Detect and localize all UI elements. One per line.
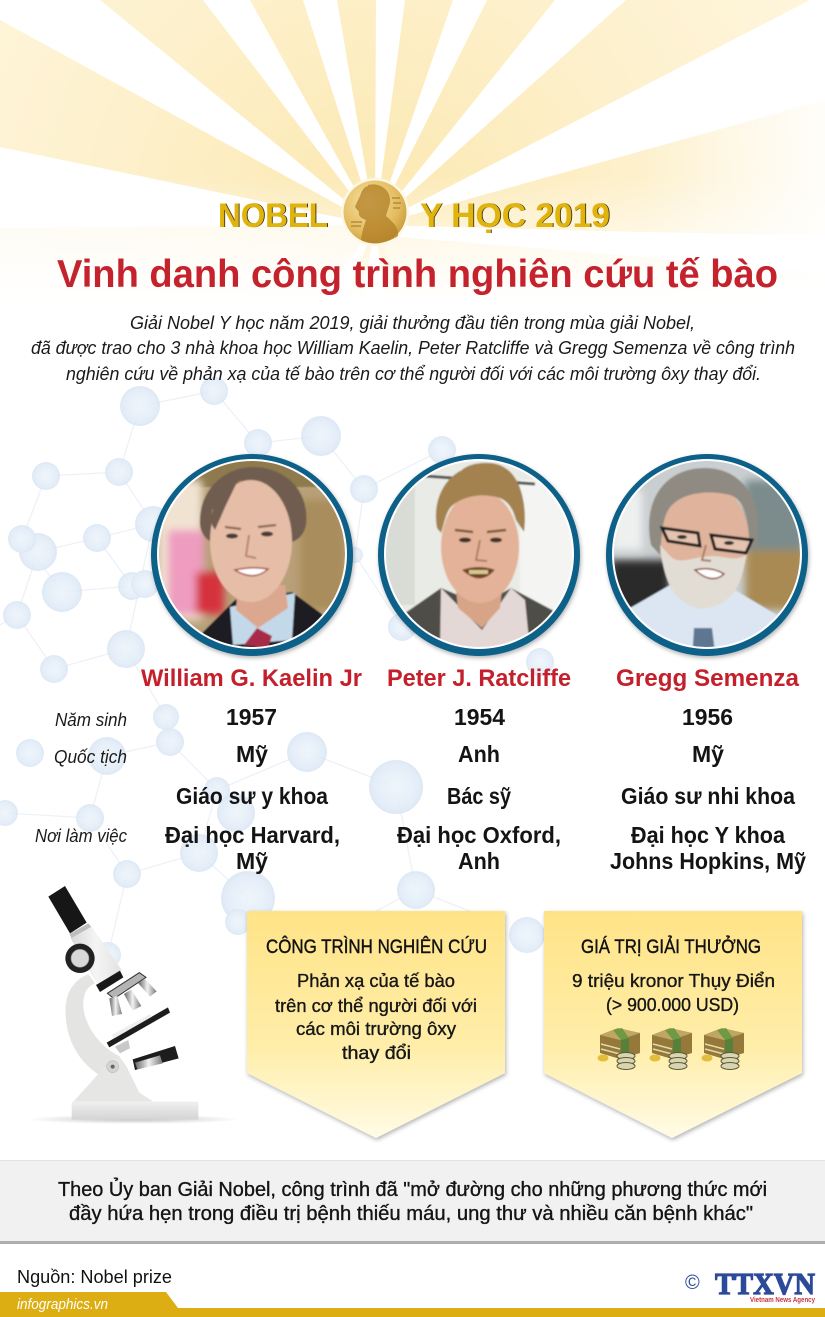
source: Nguồn: Nobel prize	[17, 1267, 172, 1287]
logo: TTXVN: TTXVN	[715, 1266, 815, 1301]
details: Ratcliffe: Bác sỹ	[447, 783, 511, 809]
prize amount	[572, 971, 775, 1015]
details: Kaelin: Đại học Harvard,	[165, 822, 340, 848]
details: Kaelin	[165, 704, 340, 874]
research description: thay đổi	[342, 1043, 411, 1063]
row labels: Năm sinh	[55, 710, 127, 730]
research description: trên cơ thể người đối với	[275, 996, 477, 1016]
icon: microscope	[27, 886, 240, 1124]
details: Semenza: Johns Hopkins, Mỹ	[610, 848, 806, 874]
prize amount: 9 triệu kronor Thụy Điển	[572, 971, 775, 991]
portrait: Peter J. Ratcliffe	[378, 454, 580, 660]
scientist names: Gregg Semenza	[616, 665, 800, 692]
details: Ratcliffe: Anh	[458, 848, 500, 874]
row labels	[35, 710, 127, 846]
title: Vinh danh công trình nghiên cứu tế bào	[57, 253, 778, 296]
scientist names: Peter J. Ratcliffe	[387, 665, 571, 692]
quote band	[0, 1160, 825, 1244]
footer bar	[0, 1292, 825, 1317]
details: Semenza: Mỹ	[692, 741, 724, 767]
logo: TTXVN	[685, 1266, 815, 1304]
research description: Phản xạ của tế bào	[297, 971, 455, 991]
details: Semenza	[610, 704, 806, 874]
heading: Y hoc 2019: Y HỌC 2019	[420, 197, 610, 235]
panel heading: research: CÔNG TRÌNH NGHIÊN CỨU	[266, 936, 487, 958]
icons: money stacks	[598, 1028, 744, 1070]
details: Ratcliffe	[397, 704, 561, 874]
intro text block: nghiên cứu về phản xạ của tế bào trên cơ thể người đối với các môi trường ôxy thay đổi.	[66, 364, 761, 384]
details: Kaelin: Mỹ	[236, 848, 268, 874]
panel: research work	[247, 911, 505, 1138]
intro text block: Giải Nobel Y học năm 2019, giải thưởng đầu tiên trong mùa giải Nobel,	[130, 313, 695, 333]
heading: Nobel: NOBEL	[218, 197, 328, 235]
icon: Nobel medal	[341, 178, 409, 246]
logo: TTXVN: Vietnam News Agency	[750, 1297, 815, 1304]
header: Nobel Y hoc 2019	[218, 178, 610, 246]
research description: các môi trường ôxy	[296, 1019, 456, 1039]
intro text block: đã được trao cho 3 nhà khoa học William Kaelin, Peter Ratcliffe và Gregg Semenza về công trình	[31, 338, 795, 358]
prize amount: (> 900.000 USD)	[606, 995, 739, 1015]
details: Ratcliffe: 1954	[454, 704, 505, 730]
portrait: William G. Kaelin Jr	[151, 454, 353, 660]
portrait: Gregg Semenza	[606, 454, 808, 660]
details: Kaelin: 1957	[226, 704, 277, 730]
details: Semenza: Đại học Y khoa	[631, 822, 785, 848]
panel heading: prize: GIÁ TRỊ GIẢI THƯỞNG	[581, 936, 761, 958]
logo: TTXVN: ©	[685, 1272, 700, 1294]
molecule network background	[0, 377, 554, 968]
details: Kaelin: Mỹ	[236, 741, 268, 767]
row labels: Quốc tịch	[54, 747, 127, 767]
scientist names	[141, 665, 800, 692]
details: Semenza: Giáo sư nhi khoa	[621, 783, 795, 809]
intro text block	[31, 313, 795, 384]
details: Ratcliffe: Đại học Oxford,	[397, 822, 561, 848]
panel: prize value	[544, 911, 802, 1138]
details: Ratcliffe: Anh	[458, 741, 500, 767]
scientist names: William G. Kaelin Jr	[141, 665, 362, 692]
row labels: Nơi làm việc	[35, 826, 127, 846]
details: Semenza: 1956	[682, 704, 733, 730]
sun rays background	[0, 0, 825, 300]
website: infographics.vn	[17, 1296, 108, 1313]
quote band: Theo Ủy ban Giải Nobel, công trình đã "mở đường cho những phương thức mới	[58, 1177, 767, 1201]
details: Kaelin: Giáo sư y khoa	[176, 783, 328, 809]
research description	[275, 971, 477, 1063]
quote band: đầy hứa hẹn trong điều trị bệnh thiếu máu, ung thư và nhiều căn bệnh khác"	[69, 1203, 753, 1225]
